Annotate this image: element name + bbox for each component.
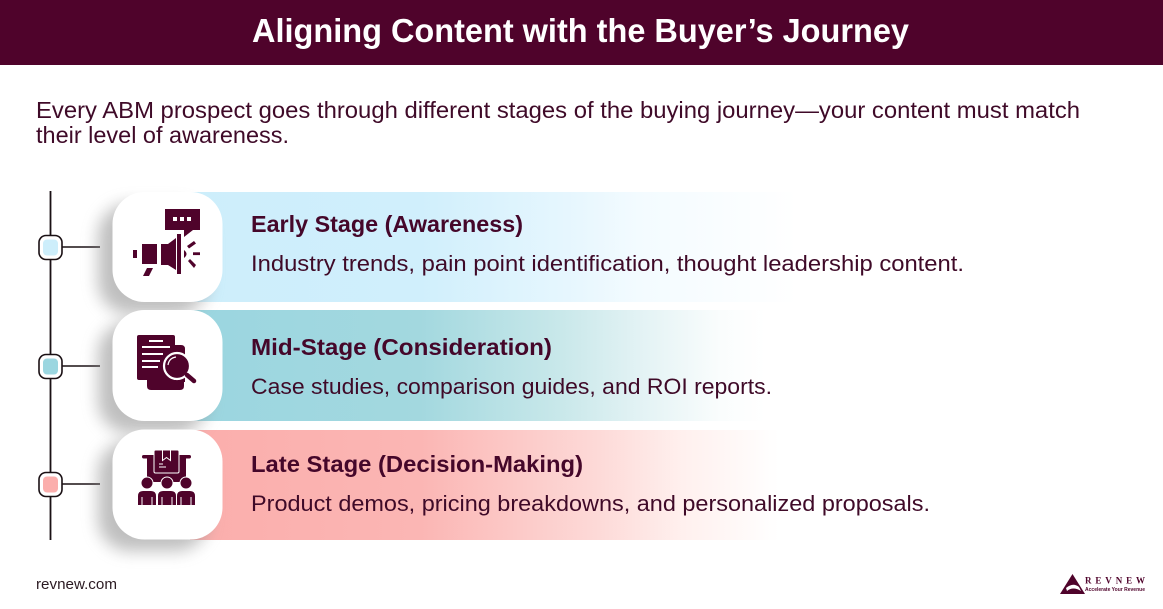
- heading: early stage: Early Stage (Awareness): [251, 211, 523, 237]
- footer: website: revnew.com: [36, 576, 117, 593]
- icon: document with magnifier: [137, 335, 194, 390]
- logo: Revnew: Accelerate Your Revenue: [1085, 587, 1145, 593]
- timeline: [39, 191, 100, 540]
- timeline node: early: [39, 236, 100, 260]
- icon: megaphone with speech bubble: [133, 209, 200, 276]
- title: Aligning Content with the Buyer’s Journey: [252, 12, 910, 49]
- intro text: Every ABM prospect goes through different stages of the buying journey—your content must match: [36, 97, 1080, 123]
- timeline node: late: [39, 472, 100, 496]
- heading: mid stage: Mid-Stage (Consideration): [251, 334, 552, 360]
- header banner: [0, 0, 1163, 65]
- heading: late stage: Late Stage (Decision-Making): [251, 451, 583, 477]
- timeline node: mid: [39, 354, 100, 378]
- card: late stage icon: [98, 430, 222, 551]
- card: mid stage icon: [98, 310, 222, 433]
- panel: mid stage: [190, 310, 830, 421]
- icon: team with box: [138, 450, 195, 505]
- card: early stage icon: [98, 192, 222, 314]
- panel: early stage: [190, 192, 964, 302]
- logo: Revnew: [1060, 574, 1145, 594]
- description: mid stage: Case studies, comparison guides, and ROI reports.: [251, 374, 772, 399]
- intro text: [36, 97, 1080, 148]
- description: late stage: Product demos, pricing breakdowns, and personalized proposals.: [251, 491, 930, 516]
- logo: Revnew: REVNEW: [1085, 576, 1145, 586]
- intro text: their level of awareness.: [36, 122, 289, 148]
- panel: late stage: [190, 430, 930, 540]
- description: early stage: Industry trends, pain point identification, thought leadership content.: [251, 251, 964, 276]
